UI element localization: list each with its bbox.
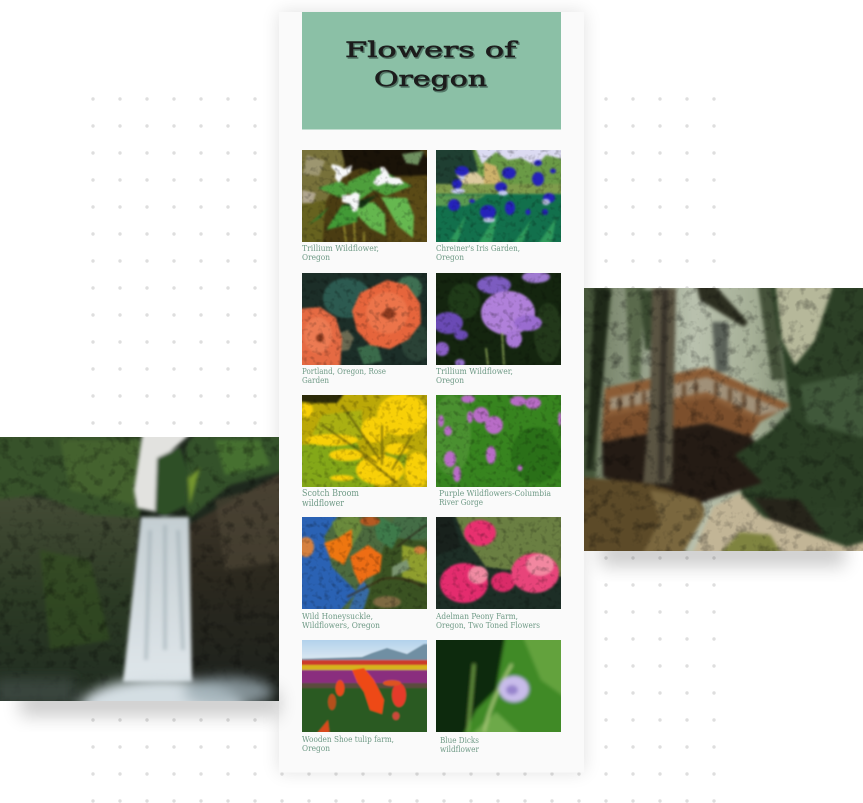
caption: blue dicks: wildflower <box>440 745 480 755</box>
caption: purple wildflowers: Purple Wildflowers-Columbia <box>439 489 551 499</box>
photo: trillium <box>302 150 427 242</box>
caption: trillium: Trillium Wildflower, <box>302 244 379 254</box>
photo: purple phlox <box>436 273 561 365</box>
caption: scotch broom: wildflower <box>302 498 344 509</box>
caption: roses <box>302 367 386 386</box>
caption: iris garden: Oregon <box>436 253 464 263</box>
title: Oregon <box>374 67 487 92</box>
photo: honeysuckle <box>302 517 427 609</box>
main card <box>279 12 584 772</box>
photo: waterfall <box>0 428 287 738</box>
photo: iris garden <box>436 150 561 242</box>
caption: trillium: Oregon <box>302 253 330 263</box>
title <box>345 38 519 92</box>
caption: tulip farm: Oregon <box>302 744 330 754</box>
caption: blue dicks: Blue Dicks <box>440 736 479 746</box>
photo: blue dicks <box>436 640 561 732</box>
caption: blue dicks <box>440 736 480 755</box>
caption: tulip farm <box>302 735 394 754</box>
caption: purple phlox: Trillium Wildflower, <box>436 367 513 377</box>
caption: peonies <box>435 612 540 631</box>
caption: trillium <box>302 244 379 263</box>
caption: tulip farm: Wooden Shoe tulip farm, <box>302 735 394 745</box>
caption: peonies: Oregon, Two Toned Flowers <box>436 621 540 631</box>
caption: scotch broom: Scotch Broom <box>302 488 359 499</box>
caption: honeysuckle: Wildflowers, Oregon <box>302 621 380 631</box>
photo: roses <box>302 273 427 365</box>
caption: scotch broom <box>302 488 359 509</box>
photo: treehouse deck <box>576 280 863 566</box>
caption: iris garden <box>436 244 520 263</box>
caption: roses: Garden <box>302 376 329 386</box>
title: Flowers of <box>345 38 519 63</box>
caption: honeysuckle: Wild Honeysuckle, <box>302 612 373 622</box>
caption: roses: Portland, Oregon, Rose <box>302 367 386 377</box>
photo: scotch broom <box>302 395 427 487</box>
title banner <box>302 12 561 130</box>
caption: purple wildflowers: River Gorge <box>439 498 483 508</box>
photo: peonies <box>436 517 561 609</box>
caption: purple phlox: Oregon <box>436 376 464 386</box>
caption: iris garden: Chreiner's Iris Garden, <box>436 244 520 254</box>
caption: peonies: Adelman Peony Farm, <box>435 612 518 622</box>
caption: honeysuckle <box>302 612 380 631</box>
caption: purple wildflowers <box>439 489 551 508</box>
caption: purple phlox <box>436 367 513 386</box>
photo: purple wildflowers <box>436 395 561 487</box>
photo: tulip farm <box>302 640 427 732</box>
